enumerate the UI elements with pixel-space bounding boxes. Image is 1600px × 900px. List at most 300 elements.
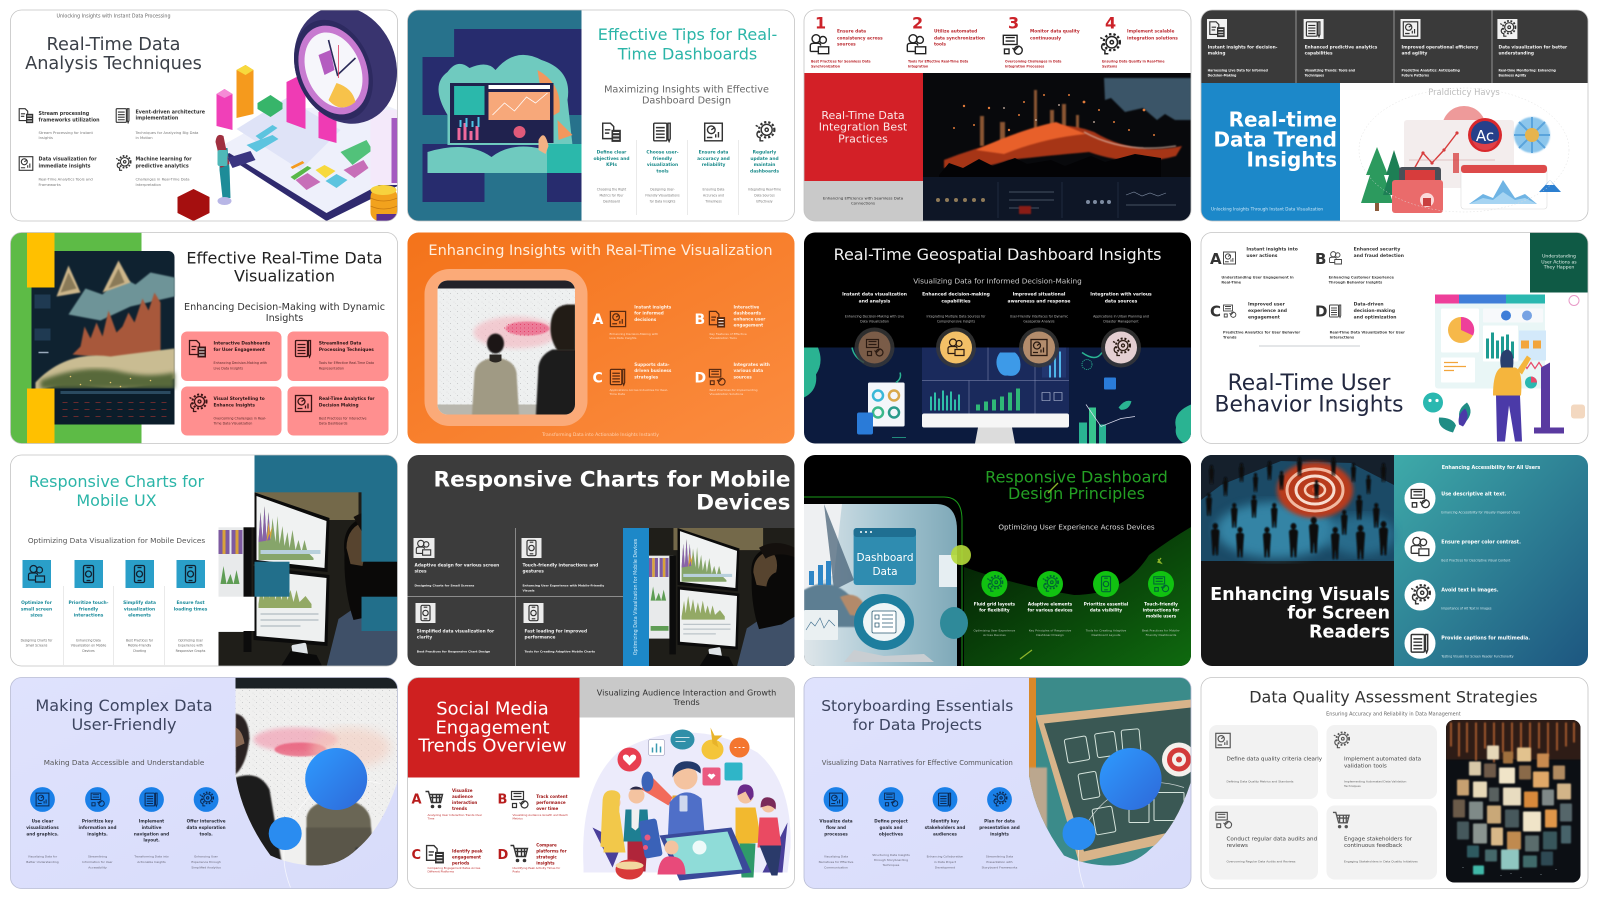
item text: data visualization — [38, 157, 97, 187]
numbered practices row: integration solutions — [1127, 35, 1178, 41]
slide: Enhancing Visuals for Screen Readers — [1201, 455, 1588, 666]
strategy cards: reviews — [1226, 843, 1248, 849]
tip columns: Designing Charts for — [21, 638, 53, 642]
essentials columns: insights — [990, 832, 1009, 836]
title: Mobile UX — [76, 491, 157, 510]
teal side panel with dashboard art — [408, 10, 582, 221]
small blue circle — [1062, 817, 1096, 850]
teal gradient panel — [1394, 455, 1588, 666]
A B C D items: for informed — [634, 310, 664, 316]
four tip grid: Touch-friendly interactions and — [522, 562, 598, 568]
numbered practices row: Tools for Effective Real-Time Data — [908, 59, 968, 63]
green corner box — [1530, 232, 1588, 292]
icon: gear head — [116, 156, 131, 170]
title: Trends Overview — [417, 736, 567, 756]
title: Effective Real-Time Data — [186, 248, 383, 268]
photo: chalkboard storyboard — [1029, 678, 1196, 868]
insight column text: awareness and response — [1008, 298, 1070, 304]
insight column text: User-Friendly Interfaces for Dynamic — [1010, 314, 1068, 318]
item text: data visualization: Real-Time Analytics Tools and — [38, 178, 93, 182]
A B C D items: engagement — [734, 322, 763, 328]
slide: Real-Time Data Integration Best Practices — [804, 10, 1191, 221]
item text: machine learning — [136, 157, 192, 187]
insight column text: Comprehensive Insights — [937, 320, 976, 324]
A B C D items: A — [592, 312, 604, 328]
tip columns: Simplify data — [123, 600, 156, 606]
slide: Real-Time Data Analysis Techniques — [10, 0, 414, 221]
image: two men at data wall — [438, 280, 578, 422]
A B C D items: Enhancing Decision-Making with — [610, 332, 658, 336]
strategy cards: Overcoming Regular Data Audits and Reviews — [1226, 860, 1296, 864]
accessibility items: Enhancing Accessibility for Visually Impaired Users — [1441, 510, 1520, 514]
grey caption panel — [804, 181, 923, 221]
blue title panel — [1201, 83, 1340, 221]
item text: stream processing — [38, 111, 100, 140]
principle columns: Tools for Creating Adaptive — [1085, 629, 1126, 633]
pink cards: Enhance Insights — [214, 402, 255, 408]
item text: data visualization: Data visualization for — [38, 157, 97, 163]
A B C D items: Integrates with — [734, 362, 770, 367]
four tip grid: Enhancing User Experience with Mobile-Friendly — [522, 584, 604, 588]
red title panel — [408, 678, 580, 778]
tip columns: information and — [79, 825, 116, 830]
pink cards: Streamlined Data — [319, 340, 361, 346]
tips columns: friendly — [653, 156, 672, 162]
title: Real-Time Geospatial Dashboard Insights — [834, 245, 1161, 264]
principle columns: for flexibility — [979, 608, 1010, 613]
caption: Unlocking Insights Through Instant Data Visualization — [1211, 207, 1323, 212]
illustration: woman at dashboard — [1423, 294, 1585, 442]
subtitle: Visualizing Data Narratives for Effective Communication — [822, 759, 1013, 767]
A B C D items: platforms for — [536, 848, 567, 854]
principle columns: Touch-friendly — [1144, 602, 1178, 607]
pink cards: Enhancing Decision-Making with — [214, 361, 267, 365]
item text: data visualization: Frameworks — [38, 183, 61, 187]
tip columns: Ensure fast — [176, 600, 205, 606]
A B C D items: Instant insights into — [1246, 246, 1298, 252]
image: crowd around red target — [1201, 455, 1396, 561]
numbered practices row: tools — [934, 42, 946, 48]
tips columns: visualization — [647, 162, 678, 168]
image: data cylinders — [1446, 720, 1581, 882]
tip columns: Use clear — [32, 818, 54, 824]
green side panel — [10, 232, 142, 444]
subtitle: Visualizing Data for Informed Decision-Making — [913, 276, 1082, 286]
tip columns: friendly — [79, 606, 98, 612]
A B C D items: Analyzing User Interaction Trends Over — [428, 813, 483, 817]
icon: dashboard — [19, 157, 33, 170]
pink cards: Best Practices for Interactive — [319, 416, 367, 420]
A B C D items: Identifying Peak Activity Times for — [512, 866, 561, 870]
insight column text: Applications in Urban Planning and — [1093, 314, 1149, 318]
icon: documents — [19, 109, 33, 123]
header text: Trends — [672, 697, 700, 707]
title: Practices — [838, 132, 888, 145]
A B C D items: Visualization Tools — [710, 336, 737, 340]
vertical blue strip — [623, 528, 649, 666]
A B C D items: Comparing Engagement Rates Across — [428, 866, 481, 870]
title: Responsive Charts for Mobile — [433, 468, 790, 493]
A B C D items: decision-making — [1354, 308, 1395, 314]
principle columns — [974, 571, 1180, 637]
insight column text: Instant data visualization — [842, 292, 907, 298]
tips columns: KPIs — [606, 162, 617, 168]
label text on dashboard panel: Data — [872, 566, 898, 578]
four tip grid: Designing Charts for Small Screens — [414, 584, 475, 588]
tips columns: Data Sources — [754, 194, 775, 198]
strategy cards: Define data quality criteria clearly — [1226, 756, 1323, 762]
four tip grid: Adaptive design for various screen — [414, 562, 499, 568]
item text: data visualization: immediate insights — [38, 164, 91, 170]
card border — [408, 678, 794, 888]
tips columns: Choose user- — [646, 149, 679, 155]
A B C D items: Trends — [1223, 336, 1237, 340]
dark top band with four insights: Data visualization for better — [1498, 44, 1568, 50]
A B C D items: C — [592, 370, 603, 386]
small blue circle — [269, 817, 302, 850]
slide: Real-time Data Trend Insights — [1201, 10, 1588, 221]
tip columns: navigation and — [134, 832, 169, 836]
numbered practices row: consistency across — [837, 35, 883, 41]
A B C D items: and fraud detection — [1354, 253, 1404, 259]
insight column text: Disaster Management — [1103, 320, 1139, 324]
A B C D items: Identify peak — [452, 848, 483, 854]
A B C D items: insights — [536, 860, 555, 866]
header text: Visualizing Audience Interaction and Growth — [597, 688, 776, 698]
red title panel — [804, 73, 923, 181]
insight column text: data sources — [1105, 298, 1138, 304]
strip label: Optimizing Data Visualization for Mobile Devices — [633, 538, 639, 655]
pink cards: Time Data Visualization — [212, 422, 252, 426]
item text: machine learning: Interpretation — [136, 183, 162, 187]
A B C D items — [1210, 246, 1405, 346]
four tip grid: performance — [524, 635, 556, 641]
tips columns: maintain — [754, 162, 775, 168]
title: Time Dashboards — [617, 44, 757, 63]
strategy cards: validation tools — [1344, 764, 1387, 770]
tip columns: Transforming Data into — [133, 854, 169, 858]
photo: people at scatter wall — [236, 678, 398, 878]
title: Analysis Techniques — [25, 54, 202, 74]
insight column text: Integration with various — [1090, 292, 1152, 298]
essentials columns: audiences — [933, 832, 957, 836]
dark top band with four insights: understanding — [1498, 50, 1534, 56]
principle columns: Adaptive elements — [1028, 602, 1073, 607]
A B C D items: driven business — [634, 368, 672, 373]
large blue circle — [305, 748, 367, 810]
A B C D items: Data-driven — [1354, 302, 1384, 308]
card border — [10, 10, 398, 221]
numbered practices row: sources — [837, 42, 856, 48]
A B C D items: audience — [452, 794, 473, 799]
strategy cards: Conduct regular data audits and — [1226, 836, 1318, 842]
title: Real-time — [1229, 108, 1337, 132]
A B C D items — [412, 788, 568, 874]
tips columns: for Data Insights — [650, 199, 676, 203]
A B C D items: engagement — [1248, 314, 1281, 320]
tip columns: small screen — [21, 606, 52, 612]
illustration: isometric dashboard and clock — [216, 10, 398, 221]
A B C D items: user actions — [1246, 253, 1278, 259]
strategy cards: Engaging Stakeholders in Data Quality Initiatives — [1344, 860, 1418, 864]
tip columns: and graphics. — [26, 832, 59, 836]
A B C D items: Predictive Analytics for User Behavior — [1223, 330, 1300, 334]
numbered practices row: Integration Processes — [1005, 64, 1044, 68]
insight column text: capabilities — [941, 298, 971, 304]
principle columns: Dashboard Design — [1036, 633, 1064, 637]
four tip grid: sizes — [414, 568, 427, 574]
item text: event-driven — [134, 109, 206, 140]
image: 3D data mountains — [32, 251, 174, 424]
image frame — [424, 269, 588, 426]
A B C D items: Interactions — [1330, 336, 1354, 340]
tip columns: Simplified Analytics — [191, 866, 221, 870]
pink cards: Visual Storytelling to — [214, 396, 265, 402]
four tip grid: Visuals — [522, 589, 535, 593]
accessibility items: Ensure proper color contrast. — [1441, 539, 1521, 545]
slide: Responsive Dashboard Design Principles — [804, 455, 1191, 666]
dark top band with four insights: Enhanced predictive analytics — [1305, 44, 1378, 50]
tip columns: Prioritize key — [82, 818, 113, 824]
dark top band with four insights — [1201, 10, 1588, 83]
dark top band with four insights: making — [1208, 50, 1225, 56]
title: Engagement — [435, 718, 550, 738]
title: Enhancing Visuals — [1210, 585, 1390, 605]
item text: event-driven: in Motion — [136, 136, 153, 140]
card border — [408, 10, 794, 221]
slide: Social Media Engagement Trends Overview — [408, 678, 794, 888]
item text: event-driven: Techniques for Analyzing Big Data — [134, 131, 198, 135]
subtitle: Insights — [266, 313, 303, 324]
tip columns: sizes — [30, 613, 43, 619]
numbered practices row: Ensuring Data Quality in Real-Time — [1102, 59, 1164, 63]
subtitle: Optimizing User Experience Across Devices — [998, 522, 1155, 531]
green box text: They Happen — [1543, 264, 1574, 270]
A B C D items: D — [498, 848, 508, 863]
tips columns: Ensure data — [699, 149, 728, 155]
tip columns: Best Practices for — [126, 638, 154, 642]
pink cards: Representation — [319, 366, 344, 370]
pink cards: Interactive Dashboards — [214, 340, 271, 346]
A B C D items: Supports data- — [634, 362, 670, 367]
tips columns: objectives and — [593, 156, 630, 162]
A B C D items: trends — [452, 806, 468, 811]
principle columns: data visibility — [1090, 608, 1122, 613]
item text: stream processing: Insights — [38, 136, 53, 140]
numbered practices row: continuously — [1030, 35, 1061, 41]
accessibility items: Provide captions for multimedia. — [1441, 635, 1530, 641]
essentials columns — [819, 787, 1020, 870]
A B C D items: Visualizing Audience Growth and Reach — [512, 813, 568, 817]
A B C D items: and optimization — [1354, 314, 1397, 320]
tip columns: tools. — [199, 832, 213, 836]
card border — [804, 10, 1191, 221]
A B C D items: Compare — [536, 842, 557, 848]
essentials columns: flow and — [826, 825, 846, 830]
strategy cards — [1209, 725, 1437, 880]
principle columns: Dashboard Layouts — [1092, 633, 1121, 637]
essentials columns: Narratives for Effective — [819, 860, 853, 864]
title: for Screen — [1287, 603, 1390, 623]
A B C D items: Time Data — [608, 392, 625, 396]
essentials columns: presentation and — [979, 825, 1020, 830]
numbered practices row: Systems — [1102, 64, 1117, 68]
illustration: trend chart, trees, lock and calendar: Ac — [1476, 127, 1494, 145]
A B C D items: A — [1210, 250, 1222, 268]
A B C D items: C — [412, 848, 421, 863]
large blue circle — [1100, 748, 1162, 810]
tip columns: elements — [128, 613, 151, 619]
item text: stream processing: frameworks utilization — [38, 118, 100, 124]
principle columns: Best Practices for Mobile- — [1142, 629, 1180, 633]
title: Real-Time User — [1228, 371, 1390, 396]
dark top band with four insights: Techniques — [1305, 74, 1324, 78]
four tip grid: Fast loading for improved — [524, 628, 587, 634]
slide: Responsive Charts for Mobile Devices — [408, 455, 795, 666]
slide: Data Quality Assessment Strategies — [1201, 678, 1588, 888]
four tip grid: gestures — [522, 568, 544, 574]
photo: analyst with monitors and teal blocks — [218, 455, 398, 667]
tip columns — [26, 787, 226, 870]
A B C D items: D — [1315, 302, 1327, 320]
principle columns: Prioritize essential — [1084, 602, 1129, 607]
A B C D items: Metrics — [512, 816, 523, 820]
tip columns: interactions — [74, 613, 104, 619]
pink cards: Data Dashboards — [319, 422, 348, 426]
A B C D items: experience and — [1248, 308, 1287, 314]
subtitle: Making Data Accessible and Understandable — [44, 758, 205, 767]
A B C D items: Through Behavior Insights — [1329, 280, 1382, 284]
A B C D items: Enhancing Customer Experience — [1329, 276, 1395, 280]
pink cards: Tools for Effective Real-Time Data — [318, 361, 374, 365]
accessibility items: Use descriptive alt text. — [1441, 491, 1507, 497]
title: Responsive Charts for — [29, 472, 205, 491]
tip columns: Actionable Insights — [137, 860, 166, 864]
pink cards: Live Data Insights — [214, 366, 243, 370]
A B C D items: Real-Time Data Visualization for User — [1330, 330, 1405, 334]
card border — [10, 455, 398, 666]
grey header panel — [580, 678, 794, 718]
essentials columns: processes — [824, 832, 848, 836]
numbered practices row: Integration — [908, 64, 929, 68]
tip columns: Experience with — [178, 644, 203, 648]
dark top band with four insights: Harnessing Live Data for Informed — [1208, 69, 1268, 73]
image: glowing orange data landscape — [923, 73, 1191, 221]
icon: coin stack — [370, 185, 398, 221]
strategy cards: Implement automated data — [1344, 756, 1421, 762]
A B C D items: Track content — [536, 794, 568, 799]
item text: machine learning: Challenges in Real-Time Data — [136, 178, 190, 182]
tips columns: Integrating Real-Time — [748, 188, 781, 192]
A B C D items: B — [1315, 250, 1326, 268]
title: Social Media — [436, 698, 549, 720]
A B C D items: various data — [734, 368, 763, 373]
tips columns — [593, 122, 781, 215]
essentials columns: in Data Project — [934, 860, 957, 864]
tip columns: Small Screens — [26, 644, 48, 648]
title: Making Complex Data — [35, 696, 213, 715]
slide: Storyboarding Essentials for Data Projects — [804, 678, 1196, 888]
numbered practices row: 1 — [815, 13, 826, 32]
principle columns: mobile users — [1146, 613, 1177, 618]
essentials columns: stakeholders and — [925, 825, 965, 830]
green box text: User Actions as — [1541, 260, 1577, 266]
essentials columns: through Storyboarding — [874, 858, 908, 862]
subtitle: Optimizing Data Visualization for Mobile Devices — [28, 536, 205, 545]
A B C D items: engagement — [452, 854, 481, 860]
title: Visualization — [234, 266, 335, 286]
tips columns: dashboards — [750, 168, 779, 174]
strategy cards: Implementing Automated Data Validation — [1344, 780, 1406, 784]
item text: machine learning: predictive analytics — [136, 164, 189, 170]
tip columns: Visualization on Mobile — [71, 644, 106, 648]
tip columns: visualization — [124, 606, 155, 612]
A B C D items: dashboards — [734, 310, 762, 316]
A B C D items: Improved user — [1248, 302, 1286, 308]
essentials columns: objectives — [879, 832, 904, 836]
A B C D items: performance — [536, 800, 566, 805]
title: Responsive Dashboard — [985, 467, 1168, 486]
tip columns: Implement — [139, 818, 164, 824]
insight column text: Enhanced decision-making — [922, 292, 990, 298]
dark top band with four insights: Future Patterns — [1402, 74, 1429, 78]
circle badges with icons — [854, 328, 1141, 368]
essentials columns: Streamlining Data — [986, 854, 1013, 858]
A B C D items: Posts — [512, 870, 520, 874]
A B C D items: Instant insights — [634, 304, 672, 310]
A B C D items: Applications Across Industries for Real- — [610, 388, 668, 392]
item text: stream processing: Stream processing — [38, 111, 90, 117]
label text on dashboard panel: Dashboard — [857, 552, 913, 564]
tip columns: data exploration — [187, 825, 226, 830]
insight column text: and analysis — [859, 298, 891, 304]
tip columns: Mobile-Friendly — [128, 644, 151, 648]
card border — [10, 232, 398, 444]
icon: notebook — [116, 109, 129, 123]
tip columns: loading times — [174, 606, 208, 612]
A B C D items: Understanding User Engagement in — [1221, 276, 1294, 280]
accessibility items: Avoid text in images. — [1441, 587, 1499, 593]
tip columns: Enhancing Data — [76, 638, 101, 642]
numbered practices row: Overcoming Challenges in Data — [1005, 59, 1061, 63]
insight column text — [842, 292, 1152, 324]
dark top band with four insights: Improved operational efficiency — [1402, 44, 1479, 50]
numbered practices row: 3 — [1008, 13, 1019, 32]
dark top band with four insights: capabilities — [1305, 50, 1333, 56]
principle columns: Key Principles of Responsive — [1029, 629, 1071, 633]
green box text: Understanding — [1542, 254, 1576, 260]
accessibility items: Importance of Alt Text in Images — [1441, 606, 1492, 610]
tip columns: Optimize for — [21, 600, 53, 606]
title: Integration Best — [819, 121, 908, 134]
numbered practices row: Ensure data — [837, 29, 866, 35]
A B C D items: B — [498, 792, 507, 808]
dark top band with four insights: Visualizing Trends: Tools and — [1305, 69, 1355, 73]
panel heading: Enhancing Accessibility for All Users — [1442, 465, 1540, 471]
tips columns: Designing User- — [650, 188, 675, 192]
tip columns — [21, 560, 208, 665]
title: Storyboarding Essentials — [821, 697, 1013, 715]
tips columns: Accuracy and — [703, 194, 724, 198]
A B C D items: Time — [426, 816, 435, 820]
tip columns: Devices — [82, 649, 95, 653]
pink cards: Overcoming Challenges in Real- — [214, 416, 267, 420]
dark top band with four insights: Real-time Monitoring: Enhancing — [1498, 69, 1556, 73]
dark top band with four insights: Instant insights for decision- — [1208, 44, 1278, 50]
tip columns: Accessibility — [88, 866, 107, 870]
A B C D items: Visualize — [452, 788, 473, 793]
tips columns: reliability — [702, 162, 725, 168]
